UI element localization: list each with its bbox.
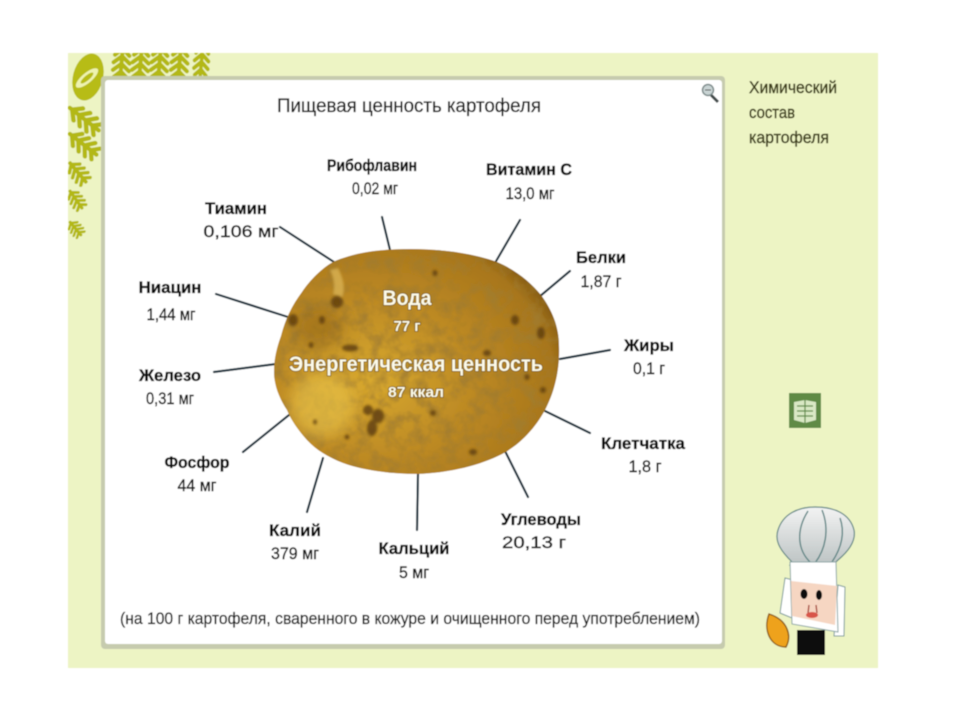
- label: fats: Жиры: [623, 336, 674, 355]
- chef character: [767, 507, 854, 655]
- side heading: [749, 78, 837, 147]
- chef ladle: [767, 614, 789, 647]
- label: riboflavin: 0,02 мг: [352, 179, 398, 198]
- label: calcium: [378, 539, 450, 582]
- slide background: [68, 53, 878, 668]
- label: potassium: [269, 521, 321, 563]
- side heading: Химический: [749, 78, 837, 97]
- icon: magnifier: [702, 84, 718, 102]
- chef hat folds: [800, 510, 842, 563]
- chef legs: [797, 630, 825, 655]
- label: potassium: 379 мг: [271, 544, 319, 563]
- potato text: water: Вода: [382, 287, 432, 310]
- label: fibre: Клетчатка: [601, 434, 686, 453]
- label: vitamin C: 13,0 мг: [506, 184, 554, 203]
- label: niacin: Ниацин: [138, 278, 202, 297]
- label: protein: 1,87 г: [580, 272, 622, 291]
- side heading: картофеля: [749, 128, 829, 147]
- label: vitamin C: [486, 160, 572, 203]
- round emblem: [72, 53, 104, 101]
- chef eyes: [800, 589, 822, 600]
- label: riboflavin: [327, 156, 417, 198]
- label: thiamine: Тиамин: [205, 199, 267, 218]
- spoke lines: [214, 217, 610, 530]
- potato illustration: [270, 245, 565, 477]
- panel: white card: [101, 76, 725, 649]
- potato highlight: [290, 373, 354, 437]
- chef hat: [777, 507, 854, 565]
- potato light streak: [330, 268, 344, 298]
- chef body: [790, 562, 838, 632]
- left leaves: [67, 105, 102, 240]
- label: calcium: Кальций: [378, 539, 450, 558]
- chef right arm: [834, 585, 845, 636]
- label: thiamine: [204, 199, 278, 241]
- label: protein: Белки: [576, 248, 626, 267]
- label: carbohydrates: Углеводы: [501, 510, 581, 529]
- label: riboflavin: Рибофлавин: [327, 156, 417, 175]
- label: potassium: Калий: [269, 521, 321, 540]
- label: fats: 0,1 г: [633, 359, 665, 378]
- potato mottled texture: [270, 245, 565, 477]
- side heading: состав: [749, 103, 795, 122]
- potato text: energy: [289, 353, 543, 401]
- chef lips: [806, 612, 818, 618]
- label: protein: [576, 248, 626, 291]
- chef mouth: [808, 605, 817, 613]
- chef left arm: [780, 578, 793, 618]
- potato spots: [288, 270, 546, 455]
- label: iron: [138, 366, 201, 408]
- footnote: (на 100 г картофеля, сваренного в кожуре и очищенного перед употреблением): [120, 609, 700, 628]
- chef face: [791, 581, 837, 625]
- label: fats: [623, 336, 674, 378]
- label: phosphorus: Фосфор: [164, 453, 230, 472]
- label: niacin: [138, 278, 202, 324]
- potato skin details: [270, 245, 565, 477]
- label: phosphorus: 44 мг: [178, 476, 216, 495]
- infographic slide: [64, 43, 878, 668]
- label: iron: Железо: [138, 366, 201, 385]
- potato text: water: 77 г: [394, 318, 420, 335]
- potato text: water: [382, 287, 432, 335]
- label: iron: 0,31 мг: [146, 389, 194, 408]
- title: Пищевая ценность картофеля: [277, 96, 541, 117]
- top leaves: [110, 52, 211, 77]
- label: vitamin C: Витамин С: [486, 160, 572, 179]
- decorative corner ornament: [64, 43, 210, 239]
- label: fibre: 1,8 г: [628, 457, 662, 476]
- label: carbohydrates: 20,13 г: [502, 533, 566, 552]
- potato brown patch: [296, 308, 344, 348]
- potato text: energy: 87 ккал: [388, 384, 444, 401]
- potato text: energy: Энергетическая ценность: [289, 353, 543, 376]
- label: carbohydrates: [501, 510, 581, 552]
- icon: book: [789, 393, 821, 428]
- label: fibre: [601, 434, 686, 476]
- label: thiamine: 0,106 мг: [204, 222, 278, 241]
- label: niacin: 1,44 мг: [146, 305, 196, 324]
- label: calcium: 5 мг: [399, 563, 429, 582]
- label: phosphorus: [164, 453, 230, 495]
